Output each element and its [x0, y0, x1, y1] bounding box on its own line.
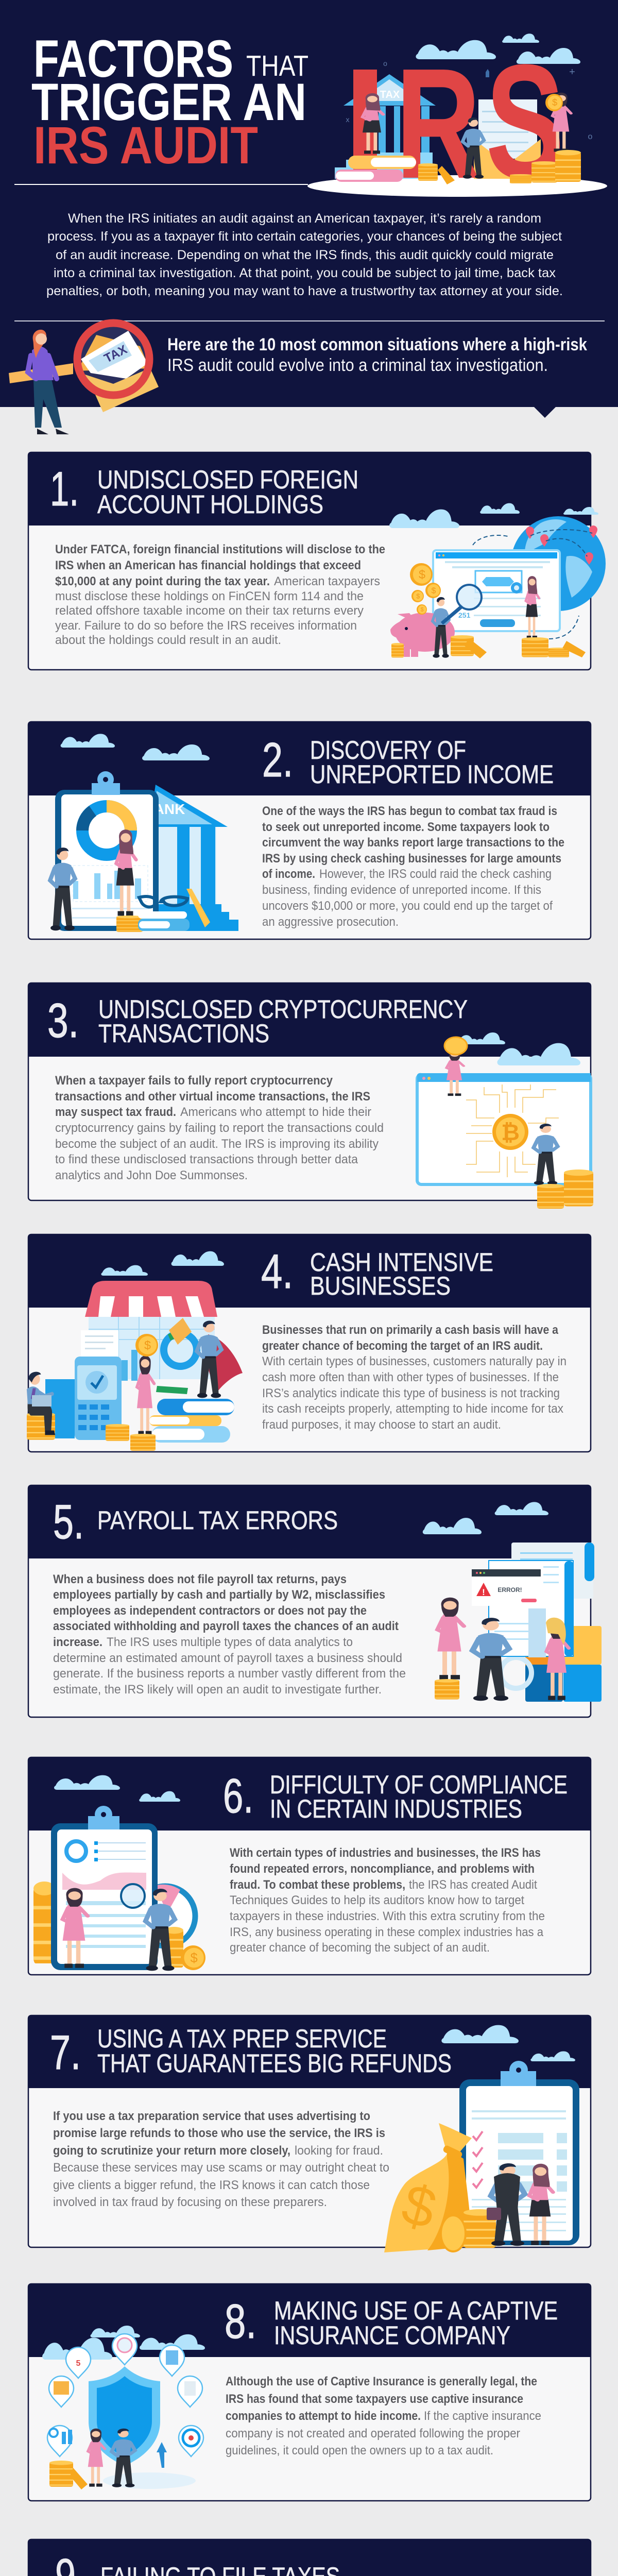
lead-in text: IRS audit could evolve into a criminal tax investigation.	[167, 355, 548, 375]
panel 2 body text: to seek out unreported income. Some taxpayers look to	[262, 820, 550, 834]
panel 5: payroll tax errors	[28, 1485, 602, 1717]
illustration: IRS letters with figures: +	[569, 66, 575, 78]
panel 4 body text: IRS’s analytics indicate this type of business is not tracking	[262, 1386, 560, 1400]
panel 5 body text: employees partially by cash and partially by W2, misclassifies	[53, 1588, 385, 1602]
panel 2 body text: an aggressive prosecution.	[262, 915, 399, 929]
panel 6 body text: Techniques Guides to help its auditors know how to target	[230, 1893, 524, 1907]
illustration: IRS letters with figures: o	[588, 132, 593, 141]
panel 4 body text: its cash receipts properly, attempting to hide income for tax	[262, 1402, 563, 1416]
title: FACTORS	[33, 29, 233, 88]
panel 4 illustration: storefront and cash	[27, 1251, 243, 1451]
panel 3 body text: may suspect tax fraud.	[55, 1105, 176, 1119]
panel 1 illustration: globe, browser, piggy bank: 251	[458, 611, 471, 619]
panel 7 illustration: clipboard, money bag and handshake: $	[396, 2172, 442, 2241]
panel 6 body text: IRS, any business operating in these complex industries has a	[230, 1925, 544, 1939]
title	[31, 29, 308, 175]
panel 6 body text: greater chance of becoming the subject of an audit.	[230, 1941, 490, 1955]
intro text: into a criminal tax investigation. At that point, you could be subject to jail time, back tax	[54, 266, 556, 280]
panel 1 body text: related offshore taxable income on their tax returns every	[55, 604, 364, 618]
panel 2 card	[28, 721, 591, 939]
panel 8 body text: guidelines, it could open the owners up to a tax audit.	[226, 2444, 493, 2458]
panel 4: cash intensive businesses	[27, 1234, 591, 1452]
panel 4 heading: 4.	[261, 1244, 293, 1298]
panel 6 body text	[230, 1846, 545, 1955]
title: THAT	[246, 49, 308, 82]
panel 6 body text: fraud. To combat these problems,	[230, 1878, 405, 1892]
panel 1: undisclosed foreign account holdings	[28, 452, 606, 670]
panel 2: discovery of unreported income	[28, 721, 591, 939]
panel 5 body text	[53, 1572, 406, 1697]
panel 7 body text: looking for fraud.	[295, 2144, 383, 2158]
panel 5 body text: determine an estimated amount of payroll taxes a business should	[53, 1651, 402, 1665]
panel 8 body text: companies to attempt to hide income.	[226, 2409, 421, 2423]
panel 2 heading	[262, 733, 554, 789]
panel 6 body text: found repeated errors, noncompliance, and problems with	[230, 1862, 535, 1876]
panel 8 card	[28, 2283, 591, 2501]
panel 5 heading: PAYROLL TAX ERRORS	[97, 1506, 338, 1535]
illustration: IRS letters with figures	[307, 30, 607, 212]
panel 2 body text: One of the ways the IRS has begun to combat tax fraud is	[262, 804, 557, 818]
panel 5 body text: estimate, the IRS likely will open an audit to investigate further.	[53, 1683, 382, 1697]
panel 4 body text: With certain types of businesses, customers naturally pay in	[262, 1354, 566, 1368]
panel 1 heading: 1.	[50, 462, 79, 516]
header band	[0, 0, 618, 418]
panel 2 body text: circumvent the way banks report large transactions to the	[262, 836, 564, 850]
panel 4 body text: cash more often than with other types of businesses. If the	[262, 1370, 559, 1384]
intro text: process. If you as a taxpayer fit into certain categories, your chances of being the subject	[47, 229, 562, 244]
panel 3 body text: become the subject of an audit. The IRS is improving its ability	[55, 1137, 379, 1151]
panel 6 body text: taxpayers in these industries. With this extra scrutiny from the	[230, 1909, 545, 1923]
panel 7 body text: going to scrutinize your return more closely,	[53, 2144, 290, 2158]
panel 1 body text: must disclose these holdings on FinCEN form 114 and the	[55, 589, 364, 603]
panel 7 heading	[50, 2024, 452, 2079]
panel 1 heading: UNDISCLOSED FOREIGN	[97, 465, 358, 494]
panel 3 body text: transactions and other virtual income transactions, the IRS	[55, 1090, 370, 1104]
panel 8 body text: If the captive insurance	[424, 2409, 541, 2423]
intro text: penalties, or both, meaning you may want to have a trustworthy tax attorney at your side.	[46, 284, 563, 298]
panel 5 card	[28, 1485, 591, 1717]
illustration: IRS letters with figures: x	[346, 115, 349, 124]
panel 3 body text: When a taxpayer fails to fully report cryptocurrency	[55, 1074, 333, 1088]
panel 5 heading: 5.	[53, 1495, 84, 1549]
panel 8 illustration: shield with icon pins	[42, 2326, 205, 2489]
panel 7 body text: Because these services may use scams or may outright cheat to	[53, 2161, 389, 2175]
panel 9 card	[28, 2539, 591, 2576]
panel 4 body text: greater chance of becoming the target of an IRS audit.	[262, 1339, 543, 1353]
panel 1 illustration: globe, browser, piggy bank	[389, 503, 606, 658]
panel 2 body text: business, finding evidence of unreported income. If this	[262, 883, 541, 897]
title: IRS AUDIT	[33, 116, 258, 175]
panel 7 heading: 7.	[50, 2025, 81, 2079]
intro text: of an audit increase. Depending on what the IRS finds, this audit quickly could migrate	[56, 248, 554, 262]
panel 2 illustration: clipboard, donut chart and bank: ANK	[154, 801, 185, 817]
panel 8 heading: INSURANCE COMPANY	[274, 2321, 510, 2350]
panel 5 body text: employees as independent contractors or does not pay the	[53, 1604, 367, 1618]
panel 5 illustration: error window and puzzle pieces: ERROR!	[497, 1586, 522, 1594]
panel 2 heading: DISCOVERY OF	[310, 736, 466, 765]
panel 8 body text: company is not created and operated following the proper	[226, 2427, 520, 2441]
panel 2 body text: of income.	[262, 867, 315, 881]
illustration: IRS letters with figures: R	[396, 36, 480, 211]
panel 6 card	[28, 1757, 591, 1975]
panel 5 body text: generate. If the business reports a number vastly different from the	[53, 1667, 406, 1681]
panel 6 body text: the IRS has created Audit	[409, 1878, 537, 1892]
panel 4 heading	[261, 1244, 493, 1300]
panel 4 body text: Businesses that run on primarily a cash basis will have a	[262, 1323, 559, 1337]
panel 7 body text	[53, 2109, 389, 2209]
panel 2 body text: However, the IRS could raid the check cashing	[319, 867, 552, 881]
panel 6 heading: 6.	[223, 1769, 253, 1823]
intro text: When the IRS initiates an audit against an American taxpayer, it’s rarely a random	[68, 211, 541, 226]
panel 1 body text: $10,000 at any point during the tax year.	[55, 574, 270, 588]
panel 4 body text	[262, 1323, 566, 1432]
panel 6: difficulty of compliance	[28, 1757, 591, 1975]
panel 4 heading: CASH INTENSIVE	[310, 1248, 493, 1277]
panel 1 body text: year. Failure to do so before the IRS receives information	[55, 619, 357, 633]
panel 3 heading: TRANSACTIONS	[98, 1019, 269, 1048]
illustration: IRS letters with figures: TAX	[380, 89, 400, 100]
panel 5 body text: increase.	[53, 1635, 102, 1649]
panel 5 illustration: error window and puzzle pieces	[423, 1502, 602, 1702]
panel 2 body text: IRS by using check cashing businesses for large amounts	[262, 852, 561, 866]
panel 3 heading	[47, 993, 468, 1048]
panel 7 heading: USING A TAX PREP SERVICE	[97, 2024, 387, 2053]
panel 3 illustration: bitcoin browser window: ₿	[501, 1120, 520, 1145]
panel 3 heading: 3.	[47, 993, 79, 1047]
panel 1 heading	[50, 462, 358, 519]
panel 2 body text: uncovers $10,000 or more, you could end up the target of	[262, 899, 553, 913]
panel 7 body text: give clients a bigger refund, the IRS knows it can catch those	[53, 2178, 370, 2192]
panel 5 body text: When a business does not file payroll tax returns, pays	[53, 1572, 347, 1586]
panel 3 body text: analytics and John Doe Summonses.	[55, 1168, 248, 1182]
panel 1 body text: Under FATCA, foreign financial institutions will disclose to the	[55, 543, 385, 556]
icon: woman with magnifier over tax envelope	[9, 323, 159, 434]
panel 5 heading	[53, 1495, 338, 1549]
panel 9: failing to file taxes	[28, 2539, 591, 2576]
panel 3 body text	[55, 1074, 384, 1182]
panel 4 heading: BUSINESSES	[310, 1272, 451, 1300]
panel 6 heading: IN CERTAIN INDUSTRIES	[270, 1794, 522, 1823]
panel 8 body text: Although the use of Captive Insurance is generally legal, the	[226, 2375, 537, 2388]
panel 1 card	[28, 452, 591, 670]
panel 7 body text: involved in tax fraud by focusing on these preparers.	[53, 2195, 327, 2209]
panel 3 body text: Americans who attempt to hide their	[180, 1105, 371, 1119]
panel 3: undisclosed cryptocurrency transactions	[28, 982, 593, 1209]
panel 1 body text: American taxpayers	[274, 574, 380, 588]
divider line under intro	[14, 320, 605, 321]
panel 1 body text	[55, 543, 385, 647]
panel 8 heading: MAKING USE OF A CAPTIVE	[274, 2296, 558, 2325]
panel 5 body text: associated withholding and payroll taxes the chances of an audit	[53, 1619, 399, 1633]
icon: woman with magnifier over tax envelope: TAX	[102, 343, 129, 366]
panel 5 body text: The IRS uses multiple types of data analytics to	[107, 1635, 353, 1649]
illustration: IRS letters with figures: o	[383, 59, 387, 67]
panel 7 card	[28, 2015, 591, 2247]
panel 9 heading	[55, 2549, 340, 2576]
panel 5 illustration: error window and puzzle pieces: !	[482, 1587, 485, 1597]
lead-in text	[167, 335, 587, 375]
panel 6 illustration: clipboard, dial and coins	[33, 1775, 205, 1971]
panel 1 heading: ACCOUNT HOLDINGS	[97, 490, 323, 519]
panel 7 heading: THAT GUARANTEES BIG REFUNDS	[97, 2049, 452, 2078]
panel 8 heading: 8.	[225, 2294, 256, 2348]
panel 2 illustration: clipboard, donut chart and bank	[50, 734, 238, 932]
panel 7: tax prep service guaranteeing refunds	[28, 2015, 591, 2252]
panel 3 body text: cryptocurrency gains by failing to report the transactions could	[55, 1121, 384, 1135]
panel 1 body text: about the holdings could result in an audit.	[55, 633, 281, 647]
panel 8 body text	[226, 2375, 541, 2458]
panel 3 illustration: bitcoin browser window	[417, 1032, 593, 1209]
panel 6 heading	[223, 1769, 568, 1823]
panel 4 body text: fraud purposes, it may choose to start an audit.	[262, 1418, 501, 1432]
panel 7 body text: promise large refunds to those who use the service, the IRS is	[53, 2126, 385, 2140]
panel 7 body text: If you use a tax preparation service that uses advertising to	[53, 2109, 370, 2123]
panel 6 body text: With certain types of industries and businesses, the IRS has	[230, 1846, 541, 1860]
panel 8 illustration: shield with icon pins: 5	[76, 2359, 81, 2368]
panel 2 body text	[262, 804, 564, 929]
panel 8 heading	[225, 2294, 558, 2350]
title: TRIGGER AN	[31, 73, 306, 131]
panel 7 illustration: clipboard, money bag and handshake	[384, 2025, 579, 2252]
panel 8: captive insurance company	[28, 2283, 591, 2501]
intro text	[46, 211, 563, 298]
panel 3 heading: UNDISCLOSED CRYPTOCURRENCY	[98, 995, 468, 1024]
panel 2 heading: 2.	[262, 733, 293, 787]
panel 2 heading: UNREPORTED INCOME	[310, 760, 554, 789]
divider line under title	[14, 184, 308, 185]
panel 8 body text: IRS has found that some taxpayers use captive insurance	[226, 2392, 523, 2406]
panel 3 body text: to find these undisclosed transactions through better data	[55, 1153, 358, 1166]
panel 3 card	[28, 982, 591, 1200]
illustration: IRS letters with figures: S	[486, 30, 564, 212]
panel 1 body text: IRS when an American has financial holdings that exceed	[55, 558, 361, 572]
panel 4 card	[28, 1234, 591, 1452]
